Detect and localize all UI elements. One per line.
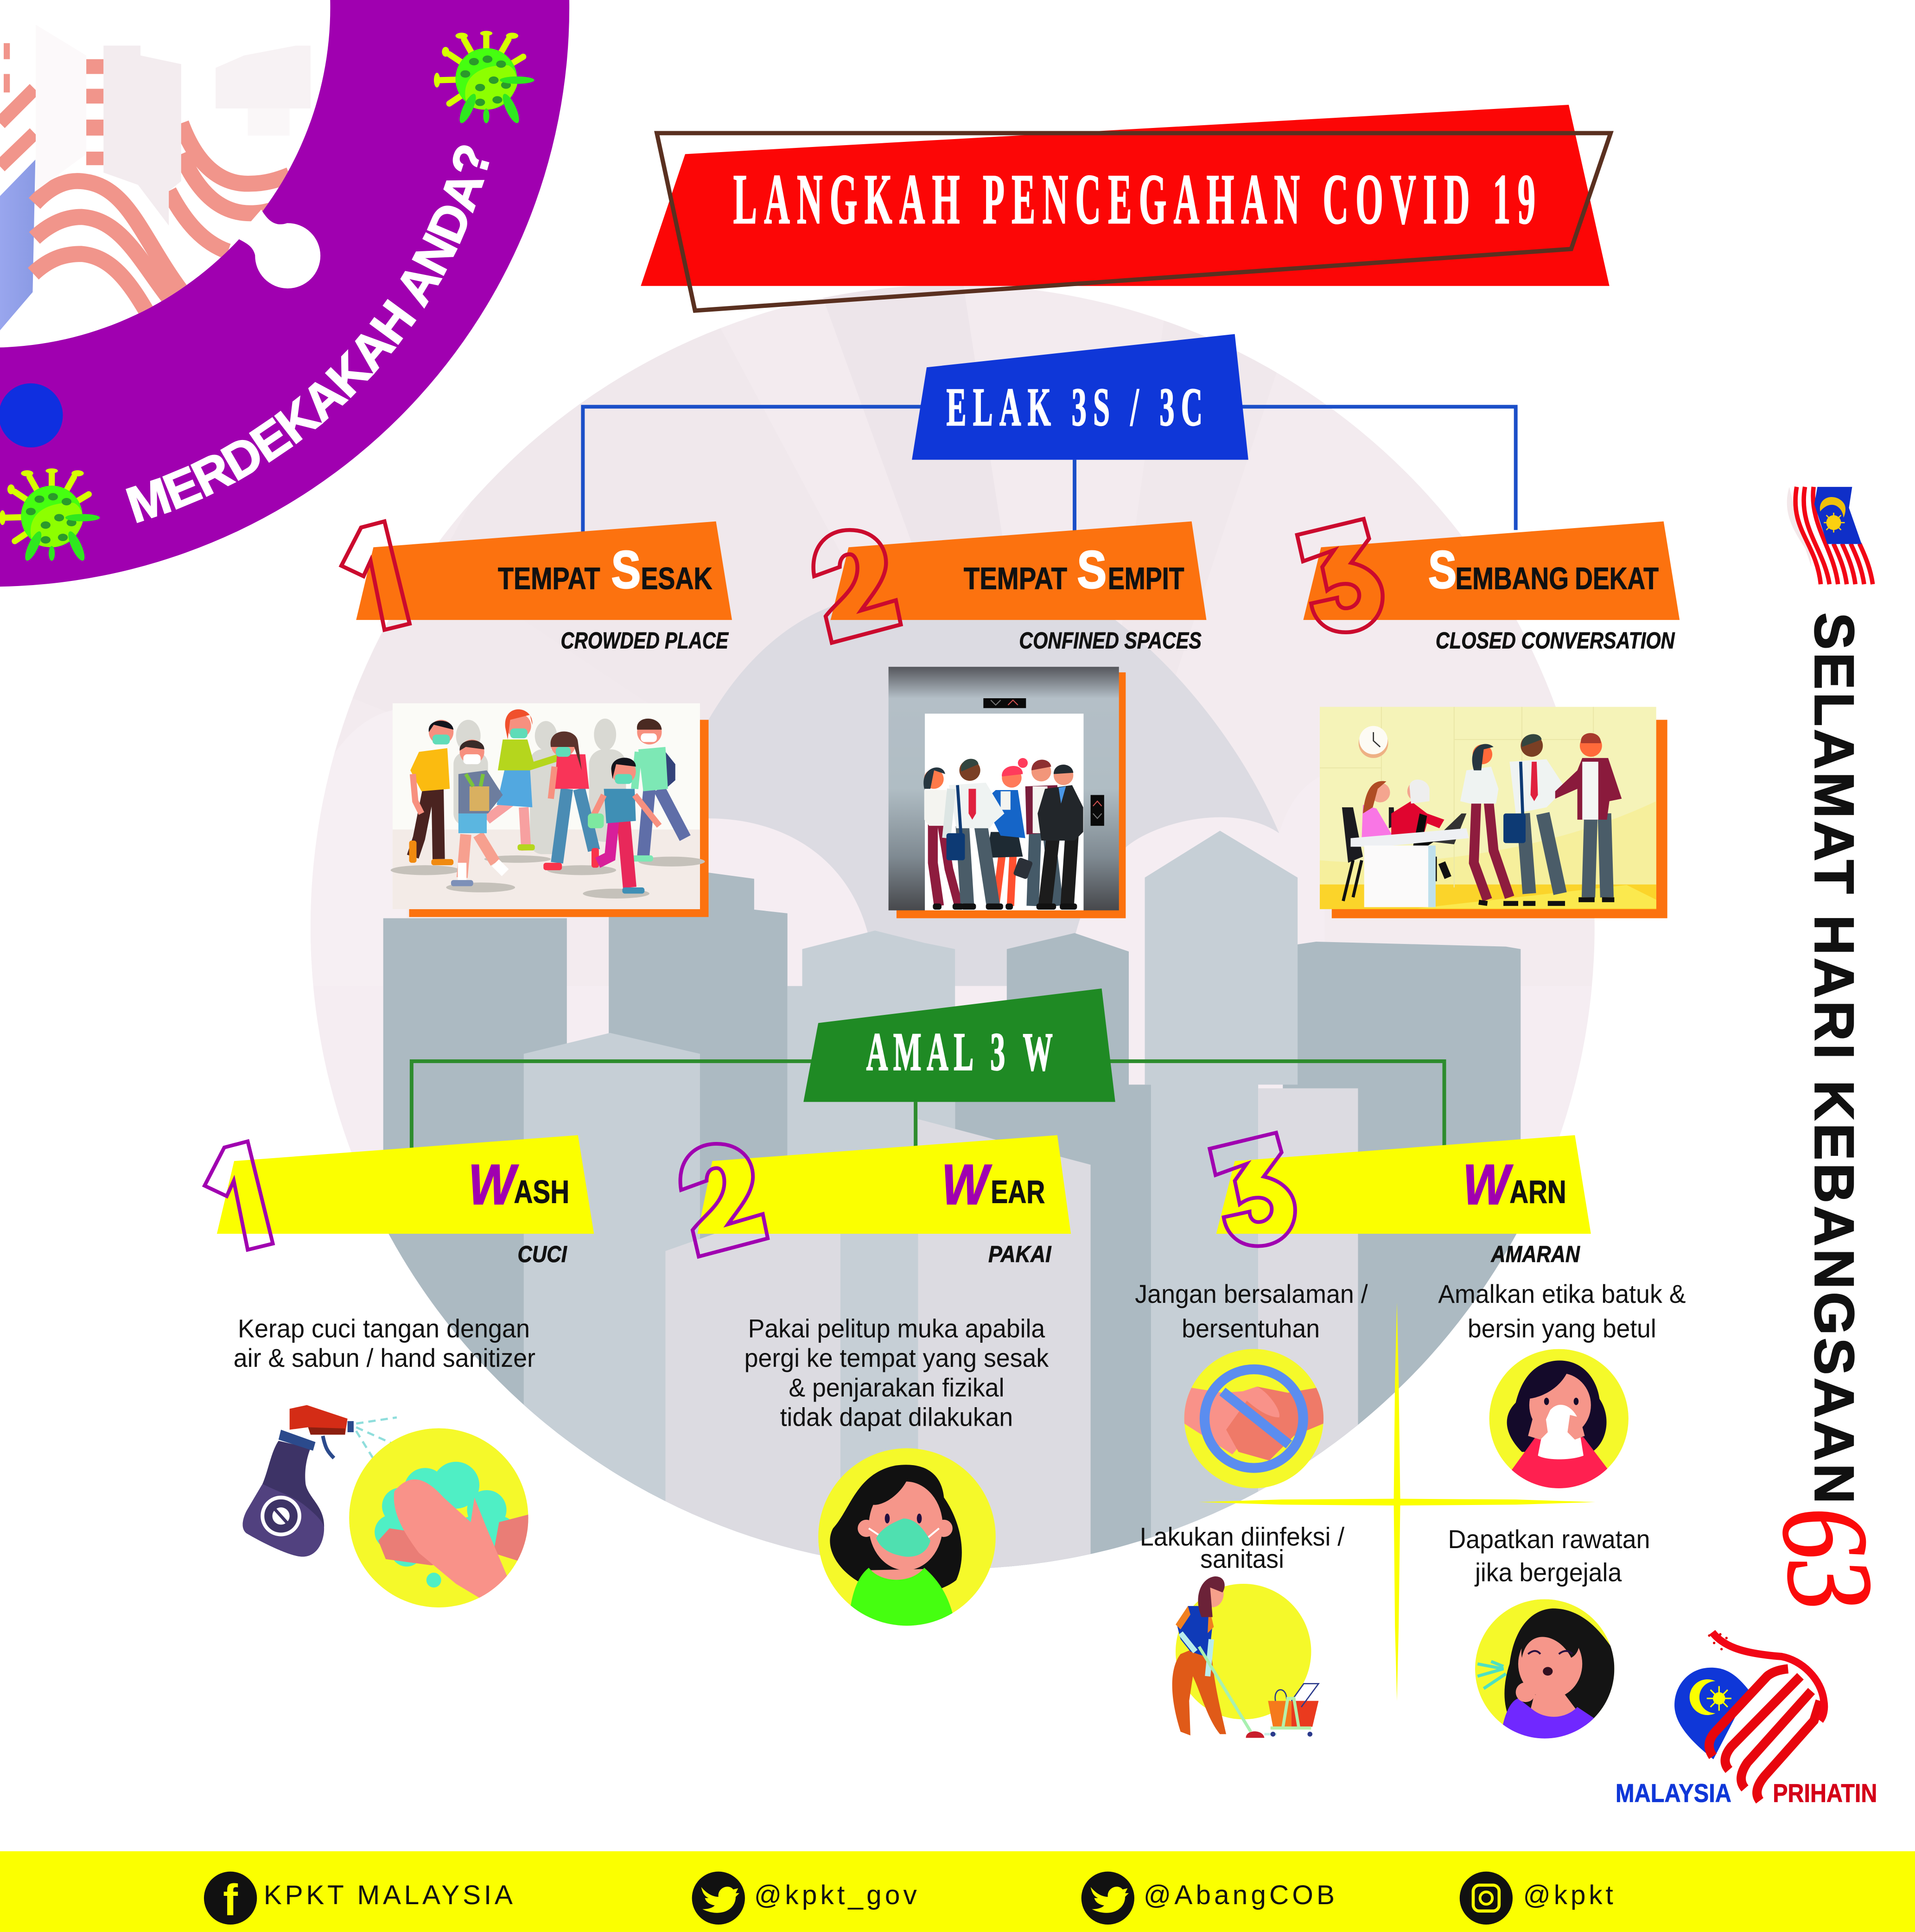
figure 4 bbox=[543, 732, 599, 870]
panel: wear bbox=[681, 1135, 1071, 1267]
panel: warn bbox=[1209, 1133, 1591, 1267]
panel: sembang dekat: DEKAT bbox=[1575, 562, 1659, 596]
illustration: crowded place bbox=[391, 703, 709, 917]
panel: warn: AMARAN bbox=[1490, 1241, 1580, 1267]
text: wear description: Pakai pelitup muka apabila bbox=[748, 1314, 1045, 1343]
facebook: f bbox=[223, 1875, 238, 1925]
footer bar bbox=[0, 1851, 1915, 1932]
panel: tempat sesak: CROWDED PLACE bbox=[561, 627, 729, 653]
icon: cleaner with mop bbox=[1172, 1576, 1318, 1738]
panel: sembang dekat: EMBANG bbox=[1455, 562, 1569, 596]
text: wash description: Kerap cuci tangan dengan bbox=[238, 1314, 530, 1343]
figure 5 bbox=[588, 758, 659, 893]
number 63: 63 bbox=[1756, 1500, 1899, 1617]
white dot bbox=[236, 210, 320, 288]
text: cough etiquette: Amalkan etika batuk & bbox=[1438, 1279, 1686, 1308]
side title: SELAMAT HARI KEBANGSAAN bbox=[1803, 612, 1865, 1504]
panel: tempat sempit bbox=[814, 522, 1206, 653]
icon: woman wearing mask bbox=[818, 1448, 996, 1629]
panel: wash bbox=[204, 1135, 594, 1267]
figure D bbox=[1025, 759, 1060, 906]
heading: elak 3s / 3c bbox=[912, 334, 1248, 460]
panel: tempat sesak: ESAK bbox=[641, 562, 713, 596]
connector lines: amal bbox=[412, 1061, 1444, 1161]
text: wear description: tidak dapat dilakukan bbox=[780, 1403, 1013, 1432]
icon: washing hands bbox=[349, 1428, 532, 1607]
facebook bbox=[204, 1872, 513, 1925]
icon: virus top bbox=[434, 31, 534, 125]
icon: coughing woman bbox=[1475, 1599, 1614, 1750]
buildings dark bbox=[383, 873, 1521, 1571]
panel: warn: ARN bbox=[1509, 1174, 1566, 1210]
icon: no handshake bbox=[1184, 1349, 1323, 1488]
panel: tempat sempit: S bbox=[1077, 541, 1107, 599]
connector lines: elak bbox=[583, 407, 1516, 539]
text: wear description bbox=[744, 1314, 1049, 1432]
inner dome bbox=[708, 606, 1279, 986]
text: no handshake: bersentuhan bbox=[1182, 1314, 1320, 1343]
text: seek treatment: Dapatkan rawatan bbox=[1448, 1524, 1650, 1554]
icon: woman with tissue bbox=[1489, 1349, 1629, 1492]
purple corner ring bbox=[0, 0, 569, 587]
panel: wear: EAR bbox=[991, 1174, 1045, 1210]
panel: wash: CUCI bbox=[517, 1241, 567, 1267]
instagram bbox=[1460, 1872, 1613, 1925]
text: disinfect: Lakukan diinfeksi / bbox=[1140, 1522, 1345, 1551]
desk people bbox=[1342, 779, 1469, 907]
panel: tempat sempit: EMPIT bbox=[1108, 562, 1184, 596]
buildings mid bbox=[524, 831, 1298, 1571]
twitter minister: @AbangCOB bbox=[1144, 1880, 1335, 1910]
clock bbox=[1359, 726, 1388, 758]
figure 2 bbox=[451, 740, 505, 886]
panel: tempat sesak bbox=[341, 522, 732, 653]
figure 1 bbox=[409, 720, 453, 865]
logo: malaysia prihatin heart bbox=[1616, 1632, 1877, 1807]
illustration: lift bbox=[889, 667, 1126, 918]
panel: wear: PAKAI bbox=[988, 1241, 1051, 1267]
buildings light bbox=[665, 1088, 1358, 1571]
curved slogan: MERDEKAKAH ANDA? bbox=[120, 139, 503, 534]
figure 6 bbox=[631, 719, 685, 861]
man in jacket bbox=[1555, 733, 1622, 900]
heading: amal 3 w: AMAL 3 W bbox=[866, 1022, 1053, 1082]
facebook: KPKT MALAYSIA bbox=[264, 1880, 513, 1910]
standing man bbox=[1503, 734, 1567, 904]
panel: sembang dekat: S bbox=[1428, 541, 1457, 599]
corner artwork: stripes and pale towers bbox=[0, 25, 311, 330]
panel: wash: W bbox=[468, 1153, 519, 1216]
panel: tempat sempit: CONFINED SPACES bbox=[1019, 627, 1202, 653]
heading: amal 3 w bbox=[803, 988, 1115, 1102]
twitter government bbox=[692, 1872, 917, 1925]
panel: sembang dekat: CLOSED CONVERSATION bbox=[1436, 627, 1675, 653]
figure C bbox=[983, 758, 1033, 906]
logo: malaysia prihatin heart: MALAYSIA bbox=[1616, 1778, 1731, 1807]
figure B bbox=[947, 759, 1005, 906]
instagram: @kpkt bbox=[1523, 1880, 1613, 1910]
standing woman bbox=[1460, 744, 1518, 904]
panel: wear: W bbox=[942, 1153, 992, 1216]
panel: warn: W bbox=[1463, 1153, 1514, 1216]
divider: yellow cross bbox=[1199, 1303, 1595, 1701]
icon: malaysian flag bbox=[1787, 487, 1873, 584]
text: no handshake bbox=[1135, 1279, 1368, 1343]
text: disinfect: sanitasi bbox=[1200, 1544, 1284, 1573]
text: seek treatment bbox=[1448, 1524, 1650, 1587]
heading: elak 3s / 3c: ELAK 3S / 3C bbox=[947, 377, 1202, 437]
illustration: office conversation bbox=[1320, 707, 1667, 918]
panel: tempat sesak: TEMPAT bbox=[498, 562, 600, 596]
text: wear description: & penjarakan fizikal bbox=[789, 1373, 1005, 1402]
twitter government: @kpkt_gov bbox=[754, 1880, 917, 1910]
text: wash description bbox=[234, 1314, 535, 1372]
panel: sembang dekat bbox=[1297, 519, 1680, 653]
text: cough etiquette bbox=[1438, 1279, 1686, 1343]
text: wear description: pergi ke tempat yang sesak bbox=[744, 1343, 1049, 1372]
twitter minister bbox=[1082, 1872, 1335, 1925]
title banner bbox=[641, 105, 1610, 311]
blue dot bbox=[0, 383, 63, 447]
text: cough etiquette: bersin yang betul bbox=[1468, 1314, 1656, 1343]
figure 3 bbox=[487, 709, 557, 850]
figure E bbox=[1037, 765, 1083, 906]
text: wash description: air & sabun / hand sanitizer bbox=[234, 1343, 535, 1372]
figure A bbox=[923, 767, 959, 906]
text: no handshake: Jangan bersalaman / bbox=[1135, 1279, 1368, 1308]
title banner: LANGKAH PENCEGAHAN COVID 19 bbox=[733, 160, 1535, 239]
text: disinfect bbox=[1140, 1522, 1345, 1573]
panel: tempat sempit: TEMPAT bbox=[964, 562, 1067, 596]
icon: virus bottom bbox=[0, 468, 100, 562]
panel: wash: ASH bbox=[514, 1174, 569, 1210]
logo: malaysia prihatin heart: PRIHATIN bbox=[1773, 1778, 1877, 1807]
icon: spray bottle bbox=[243, 1405, 397, 1556]
background circle with city skyline bbox=[296, 271, 1614, 1590]
panel: tempat sesak: S bbox=[611, 541, 641, 599]
text: seek treatment: jika bergejala bbox=[1474, 1558, 1622, 1587]
